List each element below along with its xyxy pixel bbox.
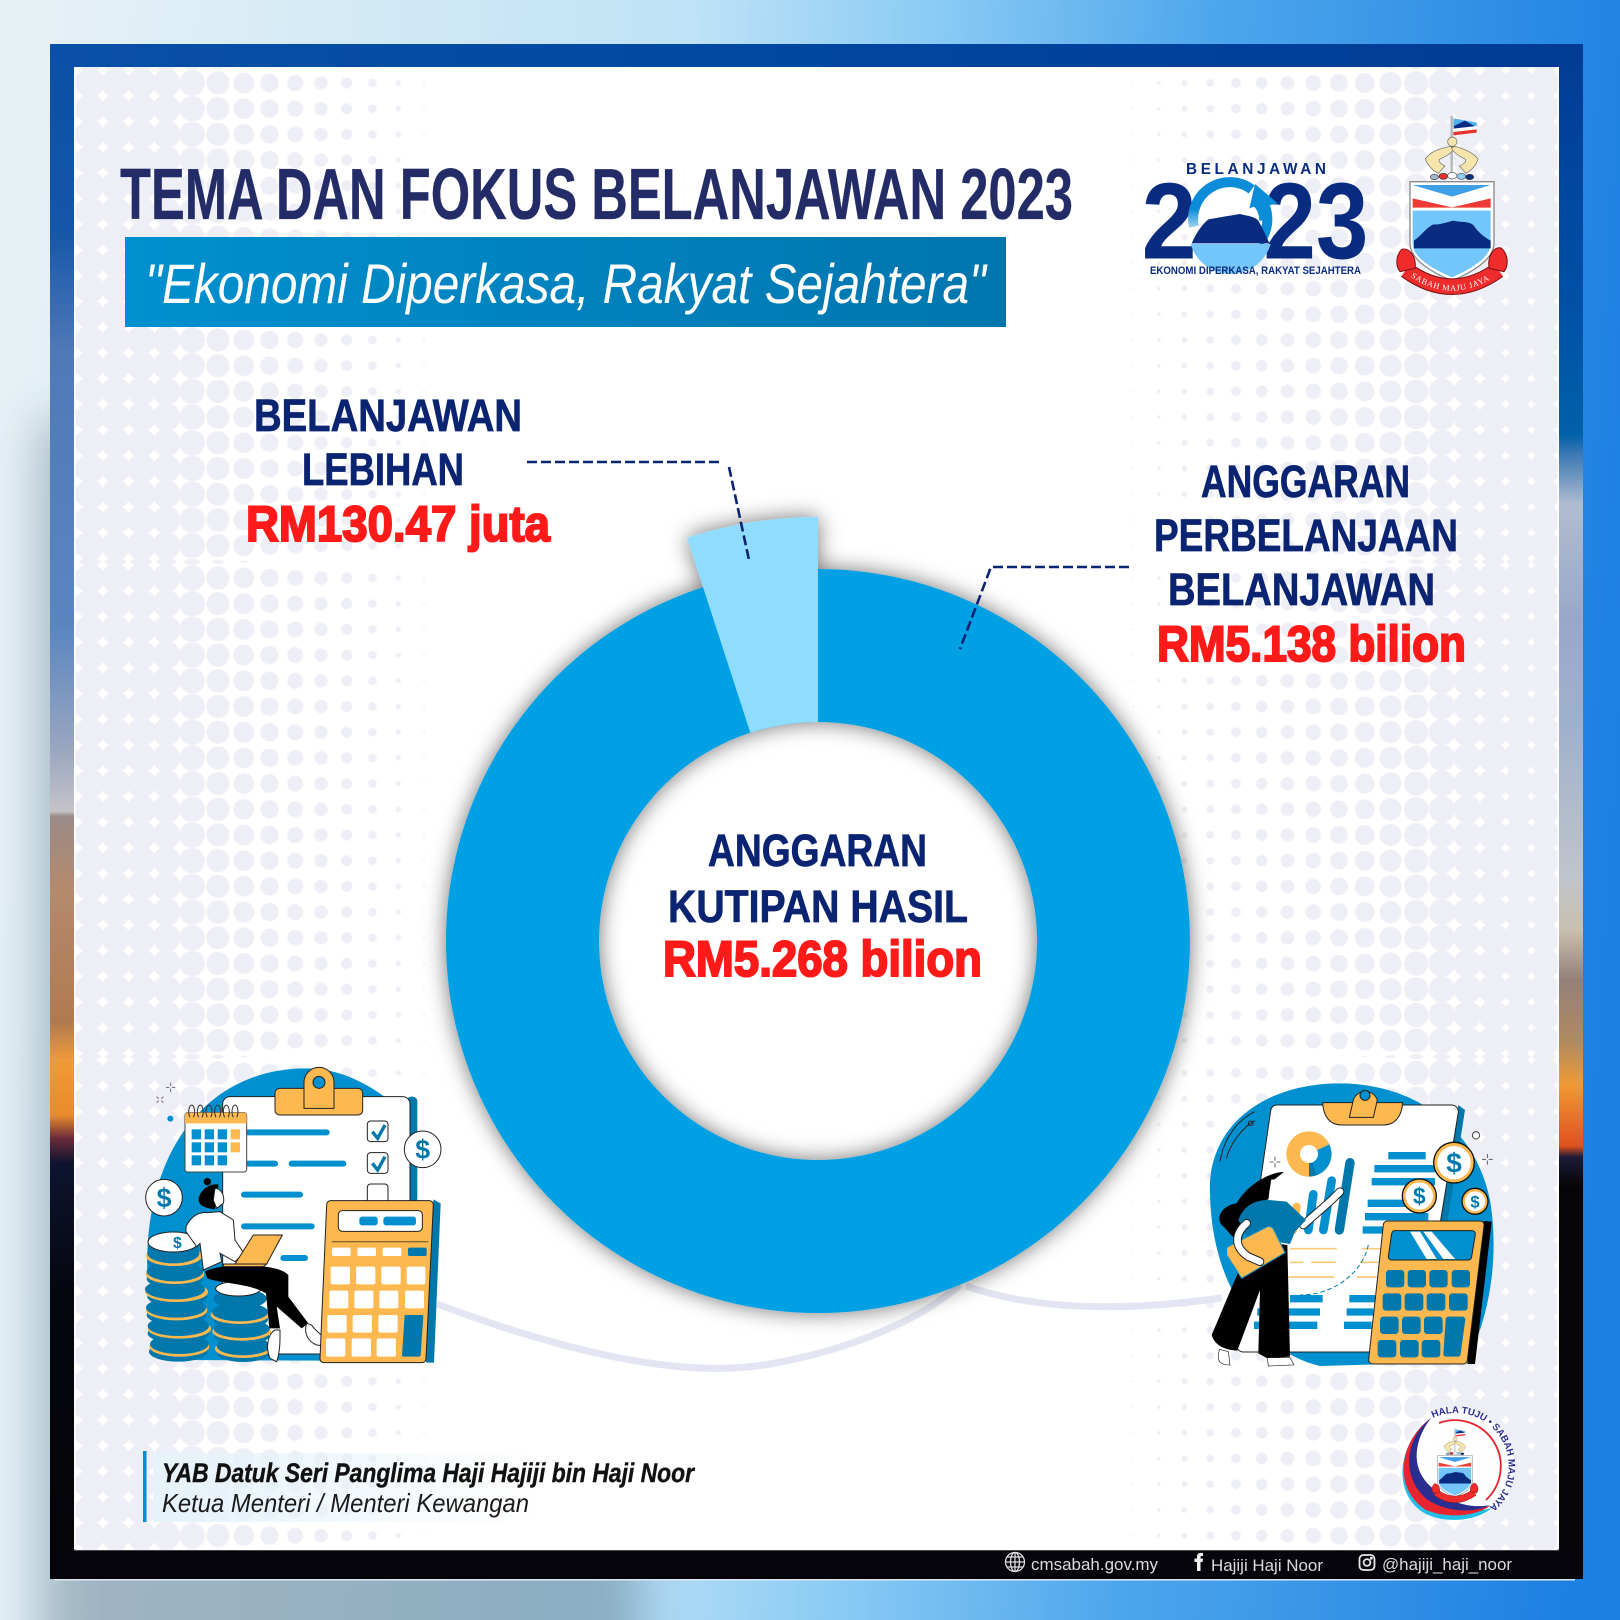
coin stacks: $ bbox=[173, 1235, 182, 1252]
crest: Sabah coat of arms: SABAH MAJU JAYA bbox=[1411, 273, 1490, 291]
footer: social links: @hajiji_haji_noor bbox=[1382, 1555, 1512, 1574]
dashed leader: perbelanjaan bbox=[960, 567, 1129, 649]
footer: social links: cmsabah.gov.my bbox=[1031, 1555, 1158, 1574]
person bbox=[186, 1178, 331, 1362]
logo: Belanjawan 2023 bbox=[1142, 161, 1368, 282]
coin stacks bbox=[145, 1232, 272, 1362]
centre label: anggaran kutipan hasil: KUTIPAN HASIL bbox=[668, 881, 968, 932]
coins bbox=[1402, 1142, 1488, 1214]
footer: social links bbox=[1006, 1552, 1512, 1575]
attribution: chief minister bbox=[143, 1451, 695, 1522]
segment: belanjawan lebihan bbox=[687, 517, 818, 733]
segment: anggaran perbelanjaan bbox=[446, 569, 1190, 1313]
crest: Sabah coat of arms bbox=[1396, 116, 1508, 295]
attribution: chief minister: Ketua Menteri / Menteri Kewangan bbox=[162, 1488, 529, 1518]
label: belanjawan lebihan bbox=[246, 390, 551, 552]
logo: Belanjawan 2023: 2 bbox=[1142, 161, 1197, 282]
label: belanjawan lebihan: RM130.47 juta bbox=[246, 496, 551, 552]
icon: globe bbox=[1006, 1552, 1024, 1572]
illustration: woman with chart and calculator bbox=[1210, 1083, 1494, 1366]
label: belanjawan lebihan: BELANJAWAN bbox=[254, 390, 522, 441]
centre label: anggaran kutipan hasil: ANGGARAN bbox=[708, 825, 927, 876]
illustration: man with laptop, checklist, calculator bbox=[145, 1067, 441, 1363]
decorative curved lines bbox=[437, 1285, 1222, 1368]
woman bbox=[1212, 1172, 1340, 1366]
footer: social links: Hajiji Haji Noor bbox=[1211, 1556, 1323, 1575]
label: anggaran perbelanjaan: PERBELANJAAN bbox=[1154, 510, 1458, 561]
theme banner bbox=[125, 237, 1006, 327]
attribution: chief minister: YAB Datuk Seri Panglima Haji Hajiji bin Haji Noor bbox=[162, 1458, 695, 1488]
calculator bbox=[1369, 1221, 1492, 1364]
coins: $ bbox=[1413, 1183, 1426, 1209]
logo: Belanjawan 2023: EKONOMI DIPERKASA, RAKYAT SEJAHTERA bbox=[1150, 265, 1361, 277]
illustration: man with laptop, checklist, calculator: $ bbox=[157, 1183, 172, 1213]
label: anggaran perbelanjaan: BELANJAWAN bbox=[1168, 564, 1435, 615]
theme banner: "Ekonomi Diperkasa, Rakyat Sejahtera" bbox=[145, 252, 988, 315]
coins: $ bbox=[1470, 1192, 1480, 1211]
dashed leader: lebihan bbox=[527, 462, 749, 560]
calculator bbox=[320, 1199, 441, 1363]
label: belanjawan lebihan: LEBIHAN bbox=[302, 444, 464, 495]
label: anggaran perbelanjaan: RM5.138 bilion bbox=[1157, 616, 1466, 672]
donut chart bbox=[446, 517, 1190, 1313]
coins: $ bbox=[1446, 1148, 1462, 1179]
icon: facebook bbox=[1194, 1553, 1203, 1571]
illustration: man with laptop, checklist, calculator: $ bbox=[415, 1135, 430, 1165]
logo: Belanjawan 2023: BELANJAWAN bbox=[1186, 161, 1326, 178]
label: anggaran perbelanjaan: ANGGARAN bbox=[1201, 456, 1410, 507]
centre label: anggaran kutipan hasil bbox=[663, 825, 982, 987]
centre label: anggaran kutipan hasil: RM5.268 bilion bbox=[663, 931, 982, 987]
seal: Hala Tuju Sabah Maju Jaya: HALA TUJU • SABAH MAJU JAYA bbox=[1431, 1406, 1516, 1510]
seal: Hala Tuju Sabah Maju Jaya bbox=[1402, 1406, 1516, 1521]
label: anggaran perbelanjaan bbox=[1154, 456, 1466, 672]
icon: instagram bbox=[1360, 1555, 1374, 1570]
logo: Belanjawan 2023: 23 bbox=[1263, 161, 1368, 282]
title: TEMA DAN FOKUS BELANJAWAN 2023 bbox=[120, 155, 1073, 235]
